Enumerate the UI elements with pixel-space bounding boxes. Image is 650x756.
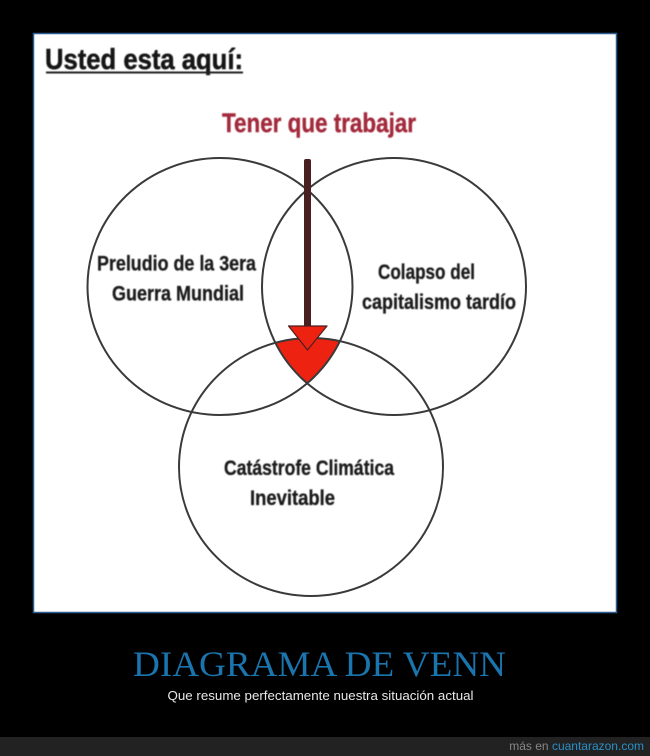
label: left circle: Guerra Mundial xyxy=(112,282,244,306)
label: right circle xyxy=(362,261,516,314)
arrow: down into the intersection xyxy=(288,159,327,350)
venn circle: left xyxy=(88,158,352,415)
heading: Usted esta aquí: Usted esta aquí: xyxy=(45,44,243,76)
caption subtitle: Que resume perfectamente nuestra situación actual xyxy=(168,689,474,703)
label: right circle: Colapso del xyxy=(378,261,475,284)
label: right circle: capitalismo tardío xyxy=(362,291,516,314)
label: left circle: Preludio de la 3era xyxy=(97,252,256,276)
red triple intersection xyxy=(276,339,338,382)
footer bar xyxy=(0,737,650,756)
panel: white picture frame xyxy=(34,34,616,612)
venn circle: bottom xyxy=(179,338,443,596)
label: left circle xyxy=(97,252,256,306)
caption title: DIAGRAMA DE VENN xyxy=(133,644,506,684)
venn circle: right xyxy=(262,158,526,415)
heading: Tener que trabajar: Tener que trabajar xyxy=(222,108,416,138)
label: bottom circle: Inevitable xyxy=(250,487,335,510)
footer bar: más en cuantarazon.com xyxy=(509,739,644,753)
label: bottom circle xyxy=(224,457,394,510)
label: bottom circle: Catástrofe Climática xyxy=(224,457,394,480)
